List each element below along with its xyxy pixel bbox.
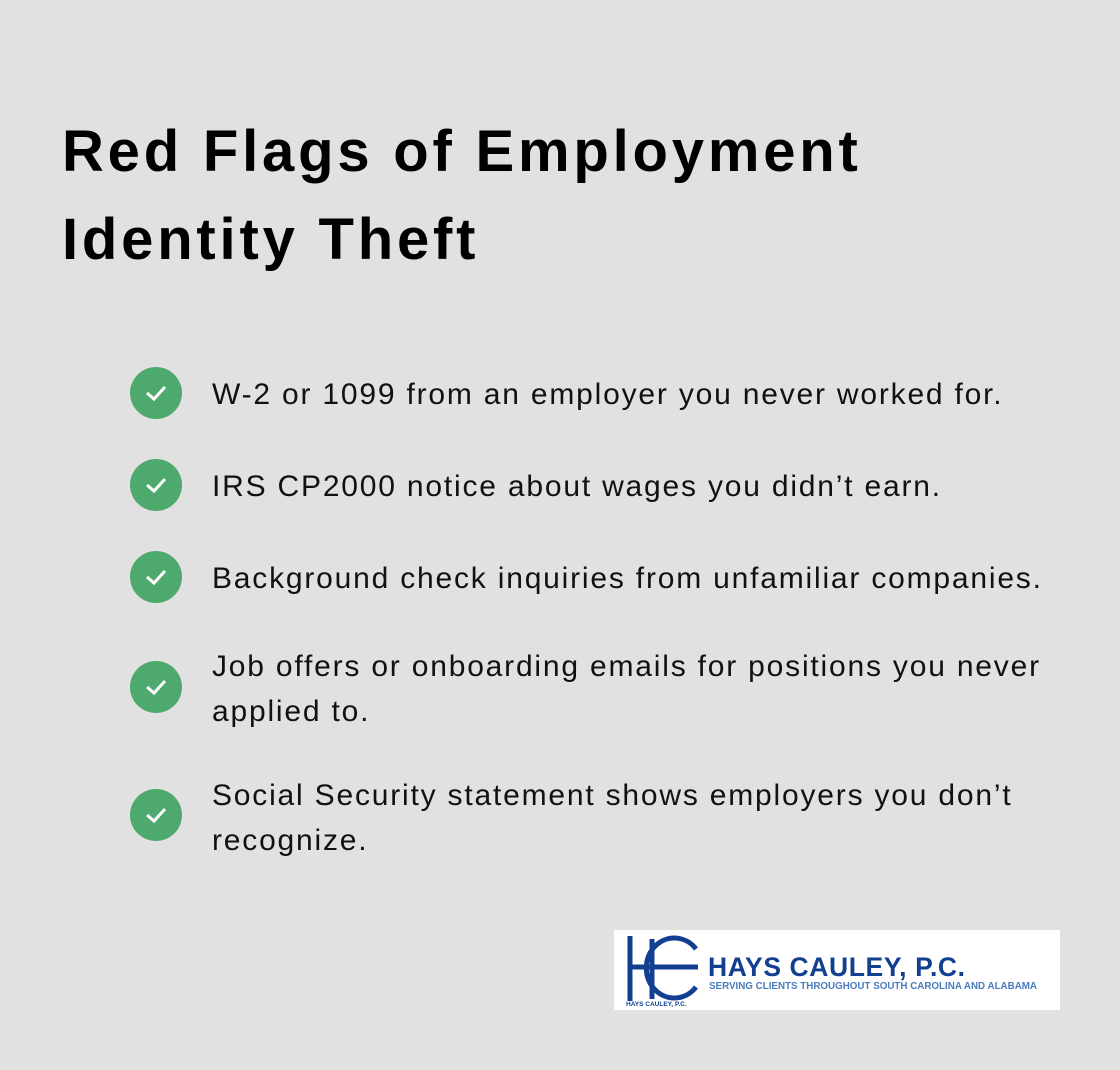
title: Identity Theft — [62, 207, 479, 272]
title: Red Flags of Employment — [62, 119, 862, 184]
title — [62, 119, 862, 272]
logo: HAYS CAULEY, P.C. — [708, 952, 966, 982]
item 4: applied to. — [212, 695, 370, 728]
item 3 — [130, 551, 1043, 603]
item 2 — [130, 459, 942, 511]
item 2: IRS CP2000 notice about wages you didn’t earn. — [212, 470, 942, 503]
item 1 — [130, 367, 1003, 419]
item 5 — [130, 779, 1012, 857]
item 3: Background check inquiries from unfamiliar companies. — [212, 562, 1043, 595]
icon: HC mark — [628, 936, 698, 1001]
logo — [614, 930, 1060, 1010]
item 5: recognize. — [212, 824, 368, 857]
item 4: Job offers or onboarding emails for positions you never — [212, 650, 1041, 683]
item 5: Social Security statement shows employers you don’t — [212, 779, 1012, 812]
item 4 — [130, 650, 1041, 728]
item 1: W-2 or 1099 from an employer you never worked for. — [212, 378, 1003, 411]
logo: SERVING CLIENTS THROUGHOUT SOUTH CAROLINA AND ALABAMA — [709, 981, 1037, 992]
logo: HAYS CAULEY, P.C. — [626, 1001, 687, 1008]
